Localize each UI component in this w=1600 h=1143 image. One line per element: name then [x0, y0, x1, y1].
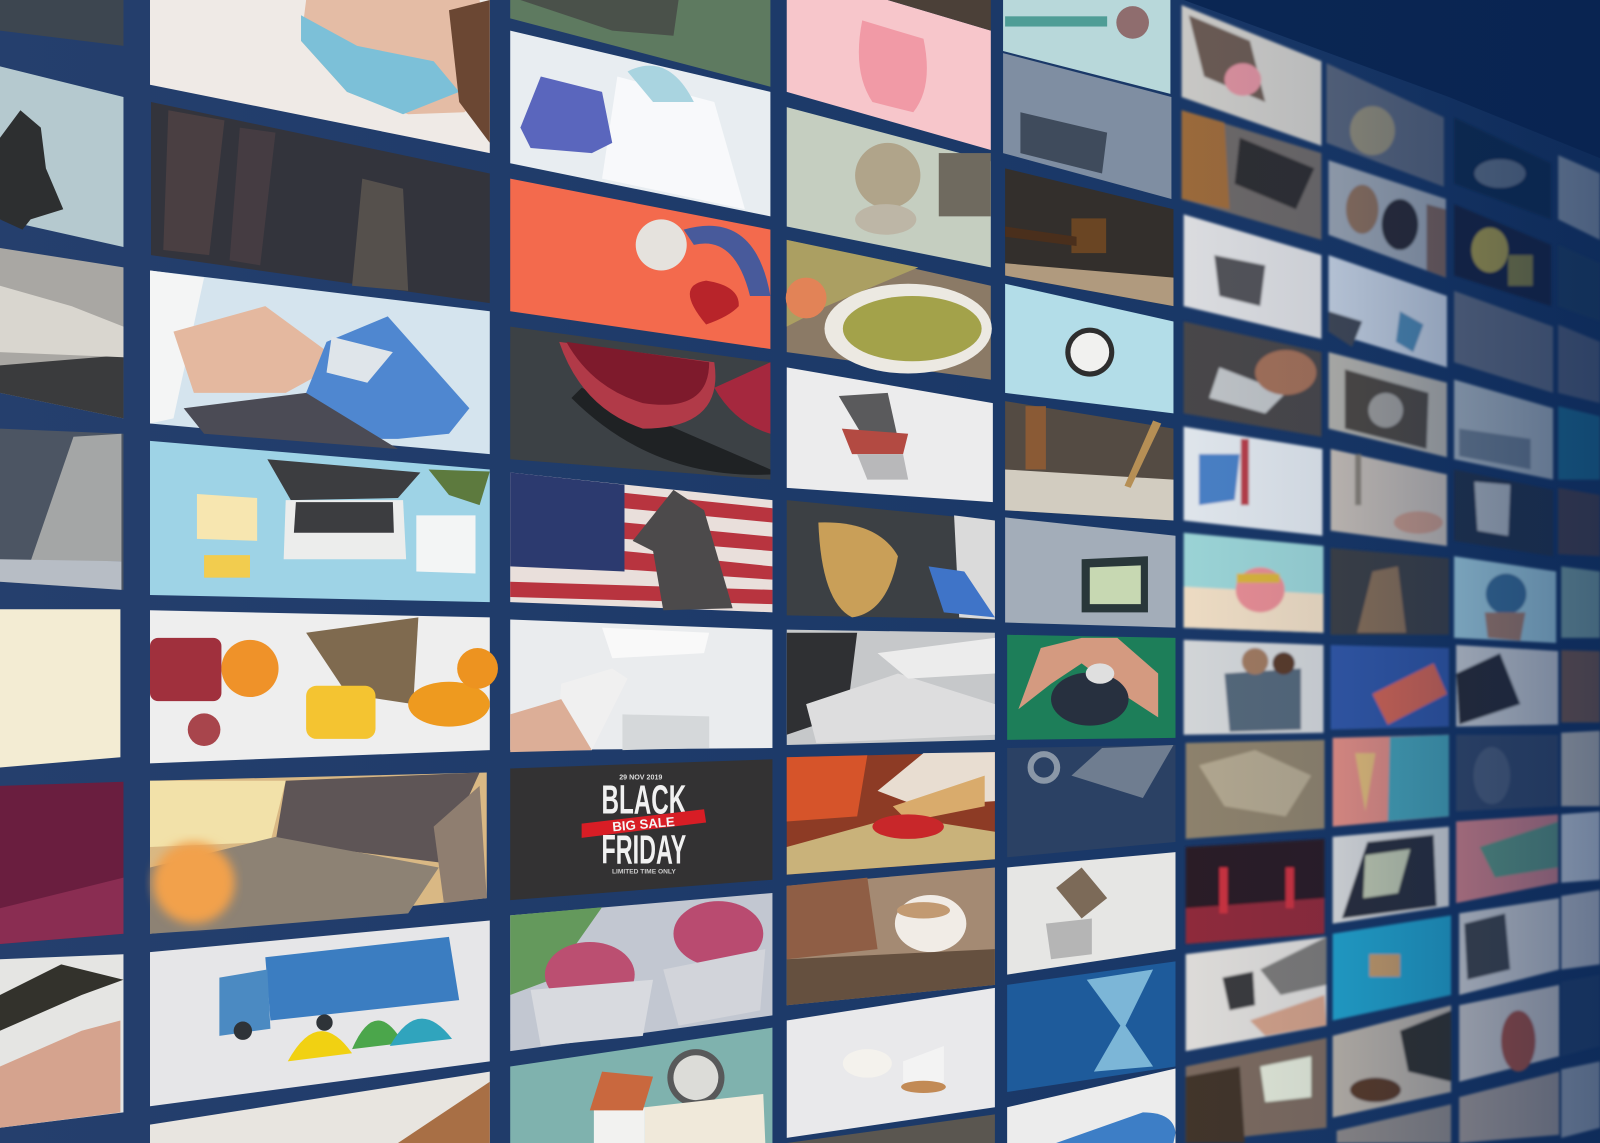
panel: pen [1005, 401, 1173, 520]
panel: couple brushing [1329, 160, 1446, 278]
panel: justice statue [0, 66, 123, 247]
panel: energy tablet [1005, 517, 1176, 628]
panel: law books [151, 102, 490, 303]
panel: camera [1329, 352, 1447, 457]
panel: business phone [1186, 937, 1327, 1051]
panel: navy person [1456, 735, 1558, 811]
panel: hourglass [1007, 961, 1176, 1092]
panel: glucose test [150, 270, 490, 454]
column 6 [1182, 5, 1327, 1143]
panel: food plate [786, 240, 992, 380]
panel: pomegranate [510, 327, 770, 480]
panel: dental chair [787, 630, 995, 745]
panel: bottom people [1337, 1104, 1451, 1143]
panel: black friday: FRIDAY [602, 826, 686, 872]
panel: maroon [0, 782, 123, 944]
panel: yerba mate [787, 988, 995, 1138]
panel: doctor [510, 31, 770, 216]
panel: black friday: BIG SALE [612, 814, 675, 834]
panel: poker chips [1007, 635, 1176, 740]
column 9 [1558, 155, 1600, 1138]
panel: laptop [0, 429, 123, 590]
panel: microscope [1184, 214, 1321, 339]
panel: blood tube [1184, 427, 1322, 536]
panel: faucet [1331, 449, 1447, 546]
panel: network cables [1331, 645, 1449, 730]
column 4 [786, 0, 995, 1143]
panel: black friday [510, 759, 772, 900]
panel: statue dark [1331, 548, 1449, 635]
panel: sofa [1454, 380, 1553, 480]
panel: calculator desk [1329, 255, 1447, 367]
panel: globe [1454, 556, 1556, 643]
panel: red-haired woman [1459, 985, 1559, 1082]
panel: black friday: BLACK [602, 776, 687, 822]
panel: coins [787, 107, 991, 267]
panel: desk [150, 441, 490, 602]
panel: tablet [1182, 110, 1321, 240]
panel: navy laptop [1007, 745, 1176, 857]
panel: air conditioner [510, 619, 772, 752]
panel: dark top [0, 0, 123, 46]
panel: gavel [1005, 168, 1173, 306]
column 1 [0, 0, 123, 1128]
column 3 [510, 0, 772, 1143]
panel: stethoscope heart [510, 179, 770, 349]
panel: dark bottom [787, 1114, 995, 1143]
panel: wood bottom [150, 1072, 490, 1143]
panel: people energy tablet [1186, 1038, 1327, 1143]
panel: shopping cart [787, 367, 993, 502]
panel: raspberries [510, 893, 772, 1051]
panel: watch hand [1454, 117, 1551, 219]
panel: alarm clock [1005, 284, 1173, 413]
panel: laptop hands [1459, 898, 1559, 995]
panel: slate hands [1454, 291, 1553, 393]
panel: ice cream cone [1333, 735, 1449, 827]
panel: sushi [1454, 204, 1551, 306]
panel: e-reader [1454, 469, 1553, 556]
panel: router and hand [0, 954, 123, 1128]
panel: piggy hand [1182, 5, 1321, 146]
panel: beach piggy [1184, 533, 1323, 633]
panel: flag [510, 473, 772, 612]
panel: bottom figure [1459, 1072, 1559, 1143]
panel: cutting pepper [787, 752, 995, 875]
panel: colored pencils [1456, 814, 1558, 903]
panel: fruit [150, 610, 498, 763]
panel: capsule [1007, 1069, 1176, 1143]
panel: cream [0, 609, 120, 767]
panel: edge tiles [1558, 155, 1600, 1138]
panel: laptop chart [150, 773, 487, 934]
panel: house model [1007, 852, 1176, 975]
panel: smartphone [1456, 645, 1558, 727]
panel: typing [1184, 321, 1321, 437]
panel: green hands [510, 0, 770, 87]
panel: masked woman [150, 0, 490, 153]
panel: suit money [1333, 827, 1449, 924]
panel: recycling truck [150, 921, 490, 1106]
panel: syringe [1003, 0, 1170, 94]
column 2 [150, 0, 498, 1143]
panel: food on dark [1327, 63, 1444, 187]
panel: coffee [787, 867, 995, 1005]
panel: school books clock [510, 1028, 772, 1143]
panel: teal cart [1333, 915, 1451, 1021]
decorative overlay [1173, 0, 1600, 1143]
panel: gavel lawyer [1333, 1005, 1451, 1117]
panel: chess [1186, 839, 1324, 944]
panel: black friday: LIMITED TIME ONLY [612, 869, 676, 876]
panel: slate desk [1003, 53, 1171, 199]
panel: pink piggy bank [787, 0, 991, 150]
panel: cracked wall [1186, 740, 1324, 839]
panel: car [0, 248, 123, 418]
column 5 [1003, 0, 1176, 1143]
column 8 [1454, 117, 1559, 1143]
panel: couple piggy [1184, 640, 1323, 735]
panel: dental skull [787, 500, 995, 619]
column 7 [1327, 63, 1451, 1143]
panel: black friday: 29 NOV 2019 [619, 774, 662, 782]
